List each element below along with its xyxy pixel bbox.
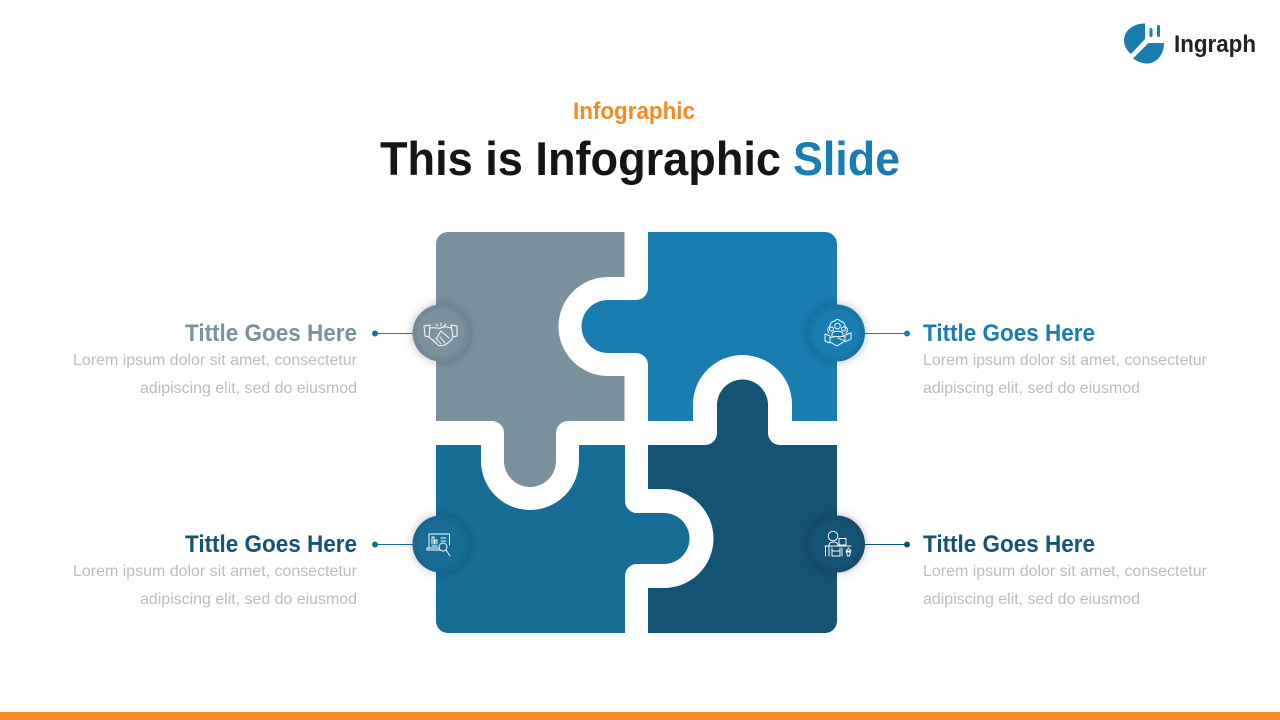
callout: bottom right (808, 516, 1208, 608)
text: title and body (923, 320, 1208, 397)
logo wordmark: Ingraph (1174, 31, 1256, 58)
text: title and body: Lorem ipsum dolor sit amet, consectetur (73, 563, 358, 580)
text: title and body: adipiscing elit, sed do eiusmod (923, 380, 1140, 397)
eyebrow heading: Infographic (573, 98, 695, 125)
callout: bottom left (73, 516, 470, 608)
puzzle graphic (436, 232, 837, 633)
text: title and body: adipiscing elit, sed do eiusmod (923, 591, 1140, 608)
text: title and body: Lorem ipsum dolor sit amet, consectetur (923, 563, 1208, 580)
text: title and body: Tittle Goes Here (923, 531, 1095, 558)
footer bar (0, 712, 1280, 720)
puzzle piece: bottom right (648, 380, 837, 633)
text: title and body: Tittle Goes Here (923, 320, 1095, 347)
text: title and body: adipiscing elit, sed do eiusmod (140, 380, 357, 397)
icon: laptop with magnifier (412, 516, 470, 572)
icon: person at desk (808, 516, 865, 572)
callout: top right (808, 304, 1208, 397)
connector line and dot (372, 542, 413, 548)
text: title and body: adipiscing elit, sed do eiusmod (140, 591, 357, 608)
text: title and body: Tittle Goes Here (185, 531, 357, 558)
logo pie mark (1124, 24, 1164, 64)
puzzle piece: top right (582, 232, 837, 421)
logo: Ingraph (1124, 24, 1256, 64)
text: title and body: Lorem ipsum dolor sit amet, consectetur (923, 352, 1208, 369)
connector line and dot (864, 542, 910, 548)
puzzle piece: top left (436, 232, 624, 487)
text: title and body: Lorem ipsum dolor sit amet, consectetur (73, 352, 358, 369)
connector line and dot (864, 330, 910, 336)
title: Slide (793, 132, 900, 185)
icon: team and handshake (808, 304, 865, 362)
puzzle piece: bottom left (436, 445, 690, 633)
text: title and body: Tittle Goes Here (185, 320, 357, 347)
title: This is Infographic (380, 132, 781, 185)
text: title and body (73, 320, 358, 397)
icon: handshake (412, 304, 470, 362)
text: title and body (73, 531, 358, 608)
connector line and dot (372, 330, 413, 336)
callout: top left (73, 304, 470, 397)
text: title and body (923, 531, 1208, 608)
